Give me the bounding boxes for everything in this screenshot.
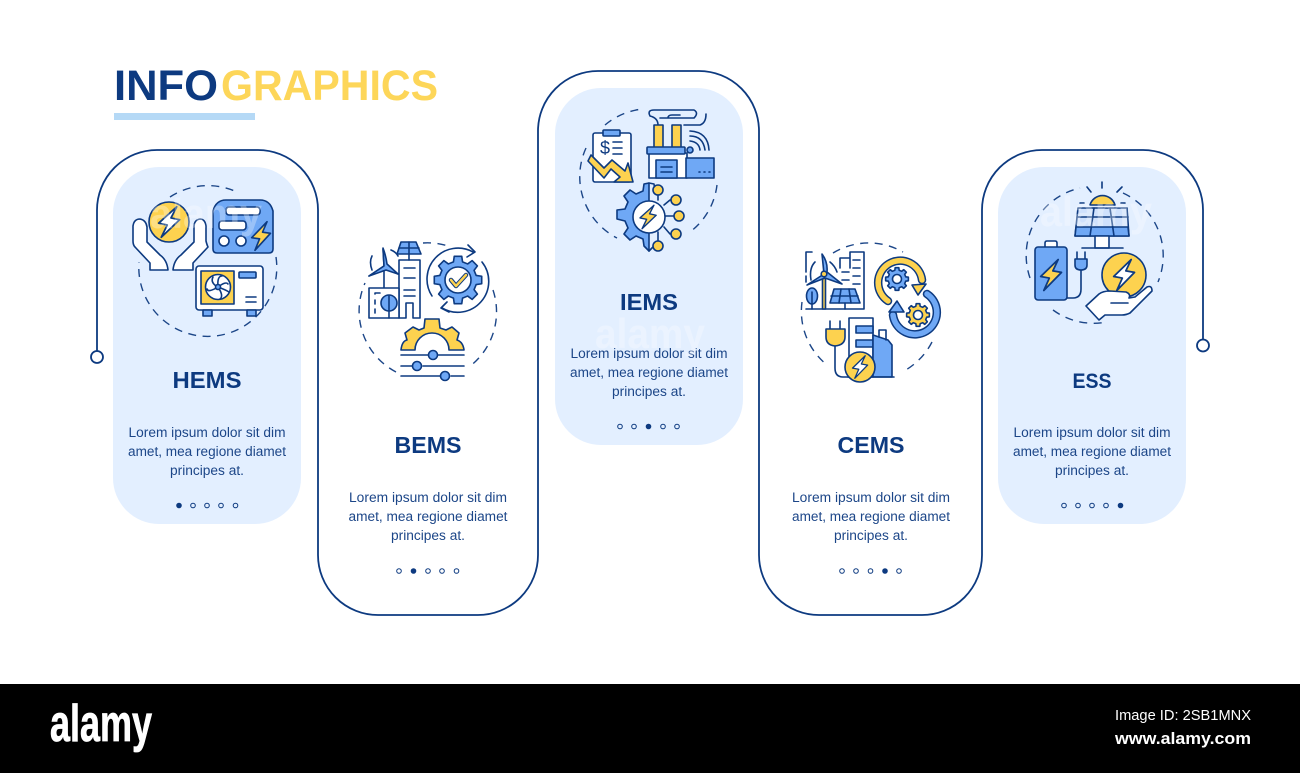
- frame end dot: [1197, 340, 1209, 352]
- icon: CEMS: [801, 243, 937, 382]
- watermarks: alamy: [1040, 188, 1153, 235]
- panel: HEMS background: [113, 167, 301, 524]
- watermarks: alamy: [150, 190, 263, 237]
- title: [114, 62, 438, 110]
- icon: IEMS: $: [600, 138, 610, 158]
- heading: BEMS: BEMS: [394, 432, 462, 458]
- footer logo: alamy: [50, 695, 152, 753]
- text: IEMS description: amet, mea regione diamet: [570, 365, 728, 380]
- footer band: [0, 684, 1300, 773]
- title: INFO: [114, 62, 218, 110]
- watermarks: [150, 188, 1153, 357]
- icon: HEMS: [133, 186, 277, 336]
- text: ESS description: principes at.: [1055, 463, 1129, 478]
- text: CEMS description: principes at.: [834, 528, 908, 543]
- text: IEMS description: Lorem ipsum dolor sit dim: [570, 346, 728, 361]
- pagination: CEMS: [840, 569, 901, 573]
- heading: CEMS: CEMS: [838, 432, 904, 458]
- text: ESS description: Lorem ipsum dolor sit dim: [1014, 425, 1170, 440]
- heading: IEMS: IEMS: [620, 289, 678, 315]
- icon: BEMS: [359, 242, 497, 380]
- text: BEMS description: Lorem ipsum dolor sit dim: [349, 490, 507, 505]
- panel: IEMS background: [555, 88, 743, 445]
- icon: ESS: [1026, 182, 1163, 323]
- text: IEMS description: principes at.: [612, 384, 686, 399]
- text: BEMS description: amet, mea regione diamet: [348, 509, 508, 524]
- footer image id: Image ID: 2SB1MNX: [1115, 708, 1251, 724]
- pagination: BEMS: [397, 569, 459, 573]
- watermarks: alamy: [595, 310, 706, 357]
- text: IEMS description: [570, 346, 728, 399]
- title: GRAPHICS: [221, 62, 438, 110]
- text: HEMS description: Lorem ipsum dolor sit dim: [128, 425, 286, 440]
- text: HEMS description: amet, mea regione diamet: [128, 444, 286, 459]
- footer url: www.alamy.com: [1114, 729, 1251, 748]
- text: CEMS description: Lorem ipsum dolor sit dim: [792, 490, 950, 505]
- heading: ESS: ESS: [1072, 370, 1112, 393]
- text: ESS description: amet, mea regione diamet: [1013, 444, 1171, 459]
- pagination: HEMS: [177, 503, 238, 508]
- text: BEMS description: [348, 490, 508, 543]
- text: HEMS description: [128, 425, 286, 478]
- icon: IEMS: [580, 109, 717, 251]
- pagination: IEMS: [618, 424, 679, 429]
- panel: ESS background: [998, 167, 1186, 524]
- text: ESS description: [1013, 425, 1171, 478]
- continuous timeline frame: [97, 71, 1203, 615]
- text: CEMS description: [792, 490, 950, 543]
- text: CEMS description: amet, mea regione diamet: [792, 509, 950, 524]
- text: HEMS description: principes at.: [170, 463, 244, 478]
- heading: HEMS: HEMS: [172, 367, 242, 393]
- pagination: ESS: [1062, 503, 1123, 508]
- title underline: [114, 113, 255, 120]
- text: BEMS description: principes at.: [391, 528, 465, 543]
- frame start dot: [91, 351, 103, 363]
